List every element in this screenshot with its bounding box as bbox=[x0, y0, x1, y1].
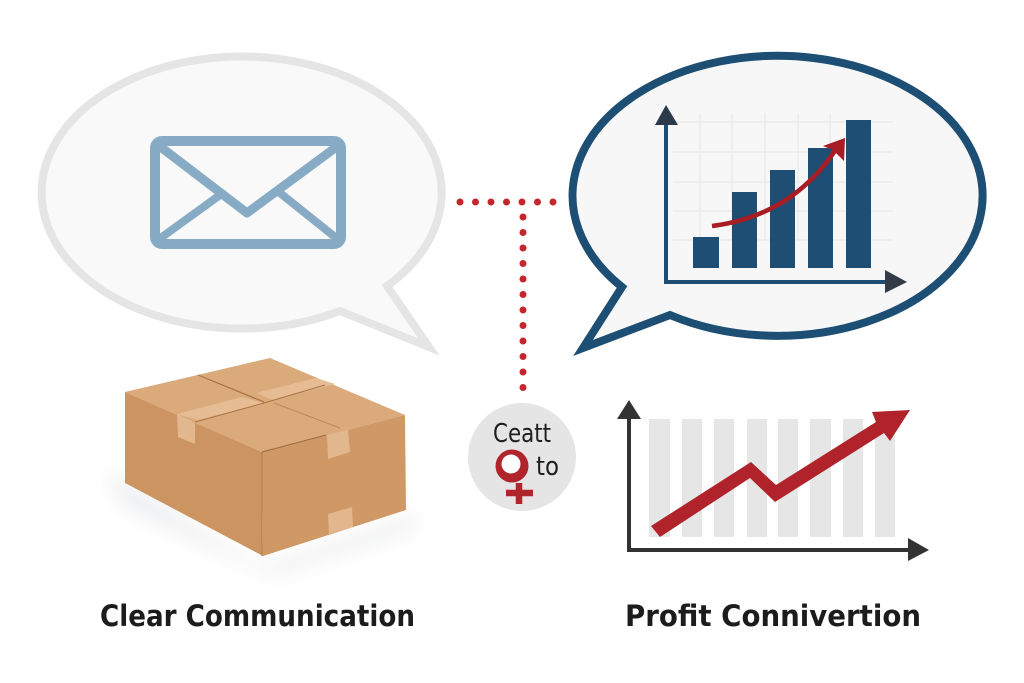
label: Profit Connivertion: Profit Connivertion bbox=[625, 599, 921, 633]
icon: red zigzag arrow bbox=[651, 410, 910, 537]
icon: female symbol bbox=[496, 450, 533, 504]
panel: right speech bubble bbox=[573, 56, 983, 348]
badge text: to: to bbox=[536, 452, 559, 482]
icon: envelope bbox=[155, 141, 341, 244]
label: Clear Communication: Clear Communication bbox=[100, 599, 415, 633]
badge: centre circle bbox=[468, 403, 576, 511]
chart: rising bars with red trend arrow bbox=[655, 105, 907, 293]
badge text: Ceatt: Ceatt bbox=[493, 419, 551, 449]
connector: red dotted lines bbox=[460, 202, 555, 397]
chart: grey bars with red profit arrow bbox=[617, 400, 929, 561]
icon: cardboard box bbox=[105, 358, 420, 575]
panel: left speech bubble bbox=[42, 57, 442, 347]
